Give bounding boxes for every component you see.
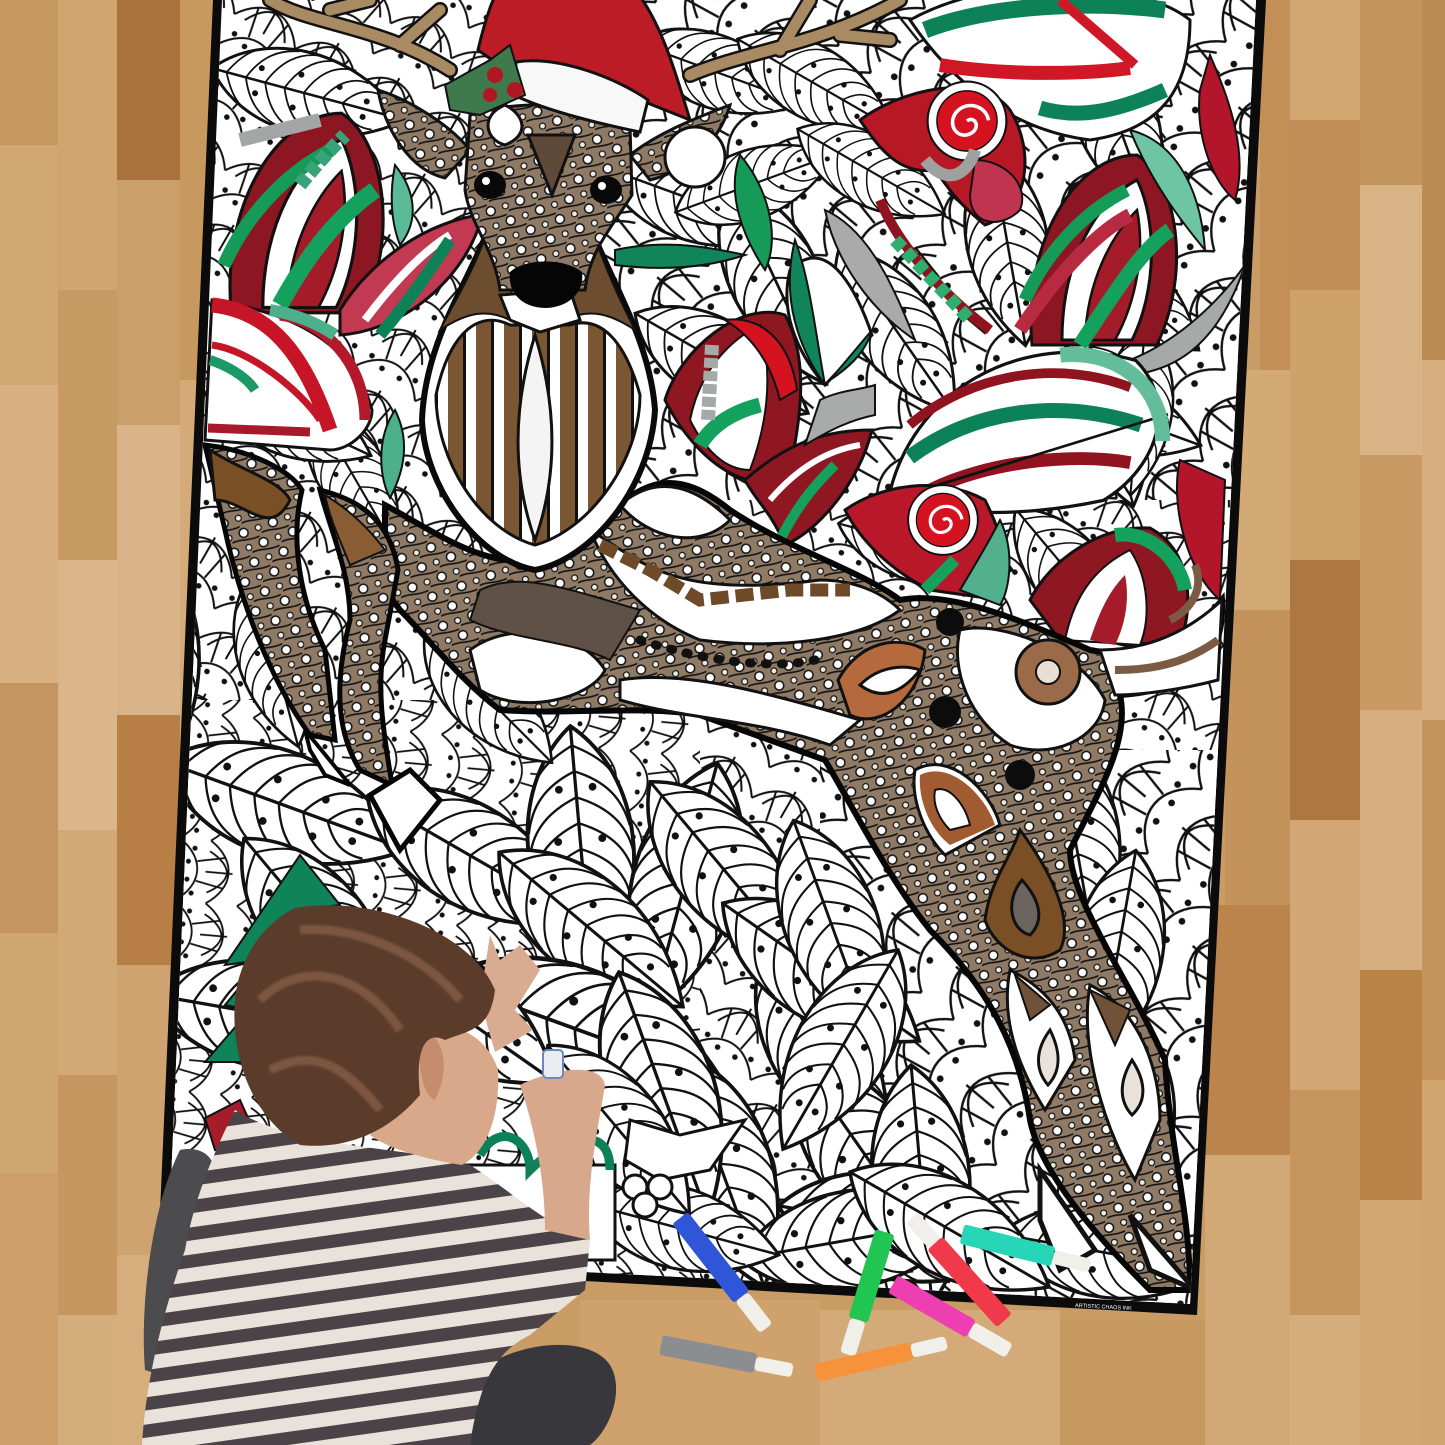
red swirl lower xyxy=(845,485,1009,605)
marker pens xyxy=(659,1211,1092,1382)
red arch lower right xyxy=(1030,460,1225,645)
deer neck and chest xyxy=(422,225,655,570)
poster artwork xyxy=(171,0,1256,1304)
marker: red xyxy=(905,1211,1012,1327)
child colouring the poster xyxy=(142,905,616,1445)
marker: teal xyxy=(960,1224,1092,1276)
gift box xyxy=(205,1100,615,1260)
marker: grey xyxy=(659,1335,794,1380)
deer antlers xyxy=(270,0,900,75)
green and red feather right centre xyxy=(888,352,1168,512)
child's leg right xyxy=(470,1345,616,1445)
poster black border xyxy=(158,0,1266,1315)
face and neck xyxy=(370,1028,498,1165)
child's leg left xyxy=(144,1149,216,1380)
uncoloured leaf background, lower xyxy=(70,503,1225,1327)
deer body xyxy=(385,483,1222,1290)
red arch centre xyxy=(665,312,875,545)
red pink leaf left xyxy=(340,215,482,335)
deer body details xyxy=(470,486,1222,1290)
holly and berries xyxy=(623,1120,745,1217)
green tree xyxy=(205,855,340,1062)
hand on poster xyxy=(480,935,540,1052)
uncoloured leaf background, upper xyxy=(183,7,1222,670)
coloured feather top right xyxy=(910,0,1240,200)
striped shirt xyxy=(142,1110,590,1445)
held marker xyxy=(543,1050,563,1078)
forearm xyxy=(520,1070,605,1240)
deer front legs xyxy=(205,445,440,850)
ear xyxy=(420,1030,444,1100)
deer head xyxy=(378,90,730,332)
coloured leaf left edge xyxy=(205,300,404,498)
red arch right xyxy=(1020,130,1245,375)
marker: pink xyxy=(888,1275,1014,1360)
base line-art pattern xyxy=(171,0,1256,1304)
marker: blue xyxy=(672,1212,774,1334)
green leaf centre xyxy=(615,155,915,385)
marker: green xyxy=(838,1229,895,1357)
red swirl upper xyxy=(860,82,1025,330)
brand credit: ARTISTIC CHAOS INK xyxy=(1075,1303,1132,1312)
red arch upper left xyxy=(224,113,413,313)
santa hat xyxy=(445,0,725,187)
hair xyxy=(234,905,495,1146)
marker: orange xyxy=(814,1334,949,1382)
